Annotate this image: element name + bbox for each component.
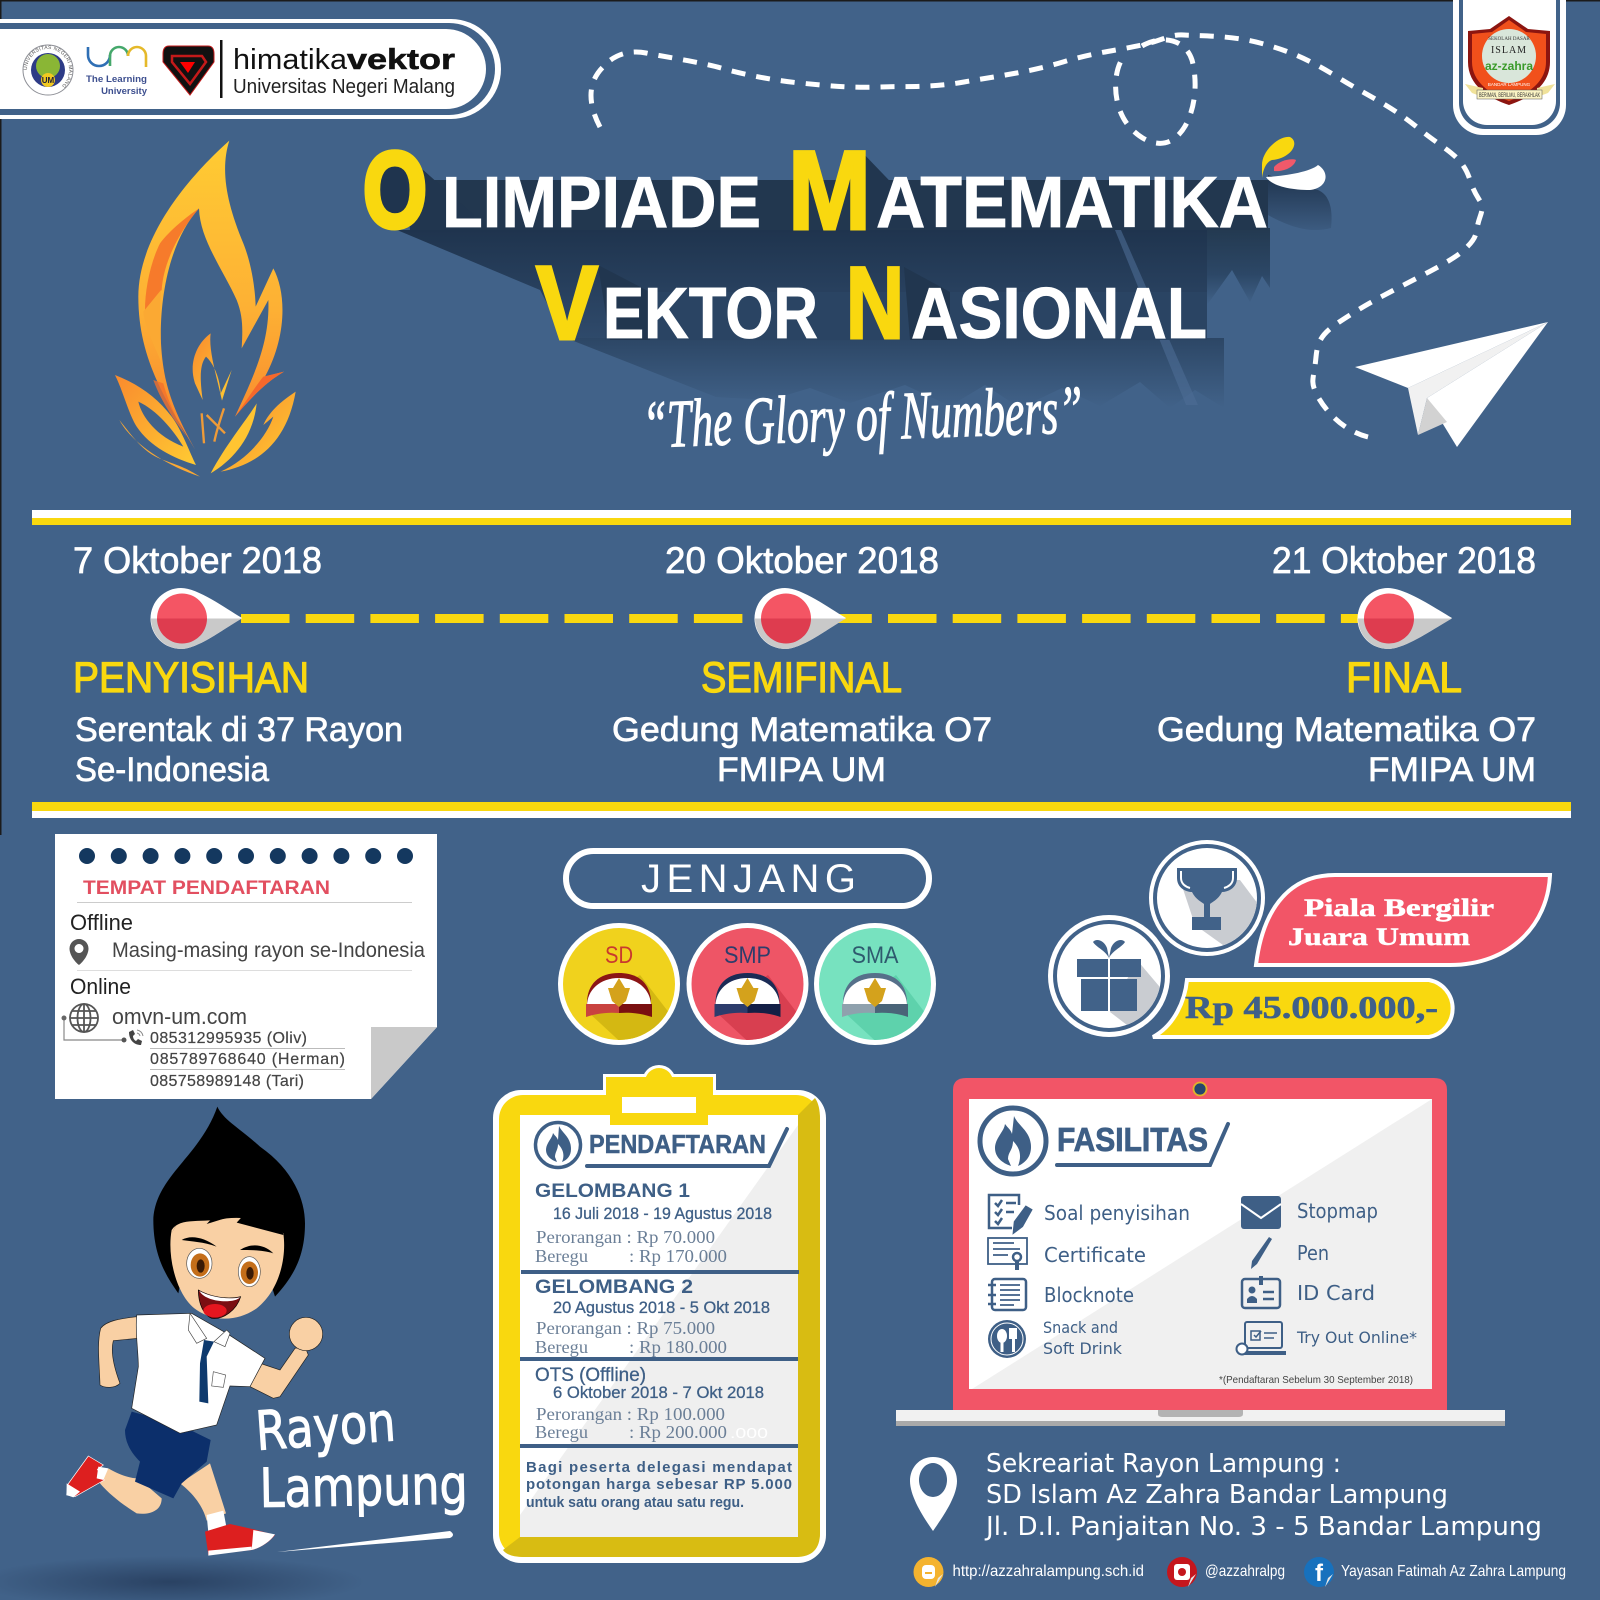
shorts [125,1412,211,1498]
logo: vektor shield [163,46,214,95]
icon: envelope [1241,1196,1281,1229]
icon: checklist [989,1195,1031,1232]
flame logo [115,141,296,477]
front shoe [205,1524,275,1555]
icon: location pin [910,1457,957,1531]
panel: pendaftaran clipboard: PENDAFTARAN [589,1129,766,1159]
icon: trophy badge [1149,840,1270,956]
title [363,128,1268,362]
logo: um the learning university [86,47,148,97]
school shield emblem: BERIMAN, BERILMU, BERAKHLAK [1479,93,1540,99]
ots: : Rp 200.000 [629,1422,727,1442]
discount note: potongan harga sebesar RP 5.000 [526,1476,792,1493]
milestone 2: Gedung Matematika O7 [612,711,992,749]
panel: pendaftaran clipboard [493,1065,826,1563]
icon: map pin [70,939,88,965]
logo: university seal: UM [42,76,55,85]
logo: university seal: UNIVERSITAS NEGERI MALANG [24,46,72,88]
gelombang 2: Perorangan : Rp 75.000 [536,1318,715,1338]
title: O [363,129,427,250]
facility items: Try Out Online* [1296,1328,1417,1347]
address block: Sekreariat Rayon Lampung : [986,1449,1341,1479]
jenjang SD badge: SD [605,942,633,969]
facility items: Certificate [1044,1243,1146,1267]
paper plane [1355,322,1548,447]
facility items: Snack and [1043,1318,1118,1337]
milestone 2: SEMIFINAL [701,654,902,702]
tie [199,1340,214,1403]
icon: facebook: f [1315,1560,1324,1587]
icon: globe [70,1004,98,1032]
timeline panel [32,510,1571,818]
collar [188,1313,230,1347]
milestone 2: FMIPA UM [717,751,886,789]
red banner: piala bergilir: Juara Umum [1288,924,1470,951]
jenjang SD badge [558,923,680,1045]
gelombang 1: GELOMBANG 1 [535,1181,690,1202]
title: ASIONAL [911,274,1207,354]
milestone 1: 7 Oktober 2018 [73,540,322,581]
fringe [172,1193,283,1235]
logo: himatika vektor wordmark: vektor [347,44,455,76]
ots: OTS (Offline) [535,1365,646,1386]
address block [910,1449,1542,1542]
panel: fasilitas laptop: FASILITAS [1057,1121,1208,1158]
milestone 3: FINAL [1346,654,1462,702]
milestone 2 [612,540,992,789]
icon: facebook [1304,1557,1334,1587]
school shield emblem: BANDAR LAMPUNG [1488,82,1531,87]
icon: plate and cutlery [988,1320,1026,1358]
rayon lampung lettering: Lampung [259,1453,468,1520]
milestone 3: FMIPA UM [1368,751,1536,789]
jenjang pill: JENJANG [641,857,856,901]
address block: Jl. D.I. Panjaitan No. 3 - 5 Bandar Lampung [984,1512,1542,1542]
webcam [1194,1082,1206,1096]
panel: tempat pendaftaran note: 085789768640 (Herman) [150,1051,345,1068]
milestone 1: Serentak di 37 Rayon [75,711,403,749]
milestone 3: Gedung Matematika O7 [1157,711,1536,749]
gelombang 2 [535,1277,770,1357]
right arm [250,1347,308,1398]
milestone 3: 21 Oktober 2018 [1272,540,1536,581]
facility items [1043,1199,1417,1358]
panel: tempat pendaftaran note [55,834,437,1099]
rayon lampung lettering: Rayon [254,1390,398,1463]
gelombang 1 [535,1181,772,1266]
facility items: Blocknote [1044,1283,1134,1307]
school shield emblem: ISLAM [1491,45,1527,56]
logo bar [0,19,501,119]
ots [535,1365,768,1442]
icon: online test laptop [1236,1322,1286,1354]
gelombang 1: Perorangan : Rp 70.000 [536,1227,715,1247]
hair back [153,1107,305,1297]
icon: id card [1242,1276,1280,1308]
title: N [846,246,904,360]
title: M [788,128,871,253]
icon: flame circle [980,1108,1046,1174]
back arm [99,1317,138,1387]
social links: @azzahralpg [1205,1563,1285,1580]
title: ATEMATIKA [876,163,1268,243]
jenjang SMP badge: SMP [724,942,771,969]
paper [520,1115,798,1537]
logo: himatika vektor wordmark: himatika [233,44,348,76]
jenjang pill [566,851,929,906]
panel: tempat pendaftaran note: omvn-um.com [112,1004,247,1029]
milestone 1: Se-Indonesia [75,751,269,789]
social links [914,1557,1566,1587]
face [170,1218,284,1319]
facility items: Soal penyisihan [1044,1201,1190,1225]
title: LIMPIADE [442,163,761,243]
panel: tempat pendaftaran note: 085758989148 (Tari) [150,1073,304,1090]
gelombang 2: GELOMBANG 2 [535,1277,693,1298]
title shadow [365,150,1332,408]
back leg [100,1468,162,1514]
gelombang 1: Beregu [535,1246,588,1266]
ots: .000 [730,1425,768,1442]
boy ground shadow [0,1556,365,1600]
butterfly ornament [1262,137,1326,190]
discount note: Bagi peserta delegasi mendapat [526,1459,792,1476]
discount note [526,1459,792,1511]
panel: tempat pendaftaran note: Masing-masing rayon se-Indonesia [112,939,425,962]
gelombang 1: 16 Juli 2018 - 19 Agustus 2018 [553,1204,772,1223]
ots: Beregu [535,1422,588,1442]
shirt [132,1313,265,1433]
jenjang SMA badge: SMA [852,942,898,969]
timeline dashed line [241,614,1370,623]
logo: um the learning university: The Learning [86,74,147,85]
icon: blogger [914,1557,944,1587]
milestone 2: 20 Oktober 2018 [665,540,939,581]
gelombang 2: : Rp 180.000 [629,1337,727,1357]
gelombang 2: Beregu [535,1337,588,1357]
ots: Perorangan : Rp 100.000 [536,1404,725,1424]
icon: notebook [988,1279,1026,1310]
yellow banner: prize amount [1153,980,1453,1037]
icon: certificate [988,1238,1027,1270]
panel: tempat pendaftaran note: 085312995935 (Oliv) [150,1030,307,1047]
gelombang 1: : Rp 170.000 [629,1246,727,1266]
tagline: “The Glory of Numbers” [641,371,1084,463]
jenjang SMA badge [814,923,936,1045]
connector and phone icon [62,1016,143,1045]
logo: himatika vektor wordmark [233,44,455,98]
red banner: piala bergilir [1256,875,1550,965]
rayon lampung lettering [254,1390,468,1552]
red banner: piala bergilir: Piala Bergilir [1304,895,1494,922]
facility items: ID Card [1297,1281,1375,1305]
discount note: untuk satu orang atau satu regu. [526,1494,744,1511]
panel: tempat pendaftaran note: TEMPAT PENDAFTARAN [83,877,330,899]
title: EKTOR [603,274,818,354]
school shield emblem [1465,16,1555,105]
icon: flame circle [536,1122,580,1168]
yellow banner: prize amount: Rp 45.000.000,- [1185,989,1438,1025]
mouth [198,1290,241,1319]
address block: SD Islam Az Zahra Bandar Lampung [986,1480,1448,1510]
footnote: *(Pendaftaran Sebelum 30 September 2018) [1219,1374,1413,1386]
panel: tempat pendaftaran note: Online [70,974,131,999]
school shield emblem: az-zahra [1485,59,1533,73]
milestone 3 [1157,540,1536,789]
facility items: Stopmap [1297,1199,1378,1223]
pocket [212,1372,226,1387]
social links: http://azzahralampung.sch.id [952,1563,1144,1580]
title: V [536,245,598,362]
school badge [1453,0,1566,135]
character: running boy [67,1107,323,1556]
back shoe [67,1456,104,1497]
facility items: Soft Drink [1043,1339,1123,1358]
icon: pen [1251,1237,1272,1269]
laptop base [896,1410,1505,1426]
social links: Yayasan Fatimah Az Zahra Lampung [1341,1563,1566,1580]
brows and eyes [182,1237,273,1287]
panel: fasilitas laptop [896,1078,1505,1426]
facility items: Pen [1297,1241,1329,1265]
panel: tempat pendaftaran note: Offline [70,910,133,935]
logo: himatika vektor wordmark: Universitas Negeri Malang [233,76,455,98]
clip [603,1065,716,1107]
gelombang 2: 20 Agustus 2018 - 5 Okt 2018 [553,1298,770,1317]
milestone 1 [73,540,403,789]
ots: 6 Oktober 2018 - 7 Okt 2018 [553,1383,764,1402]
dashed flight path [591,35,1482,437]
logo: um the learning university: University [101,86,148,97]
front leg [180,1463,226,1521]
icon: gift badge [1048,915,1175,1037]
milestone 1: PENYISIHAN [73,654,309,702]
jenjang SMP badge [686,923,808,1045]
icon: instagram [1167,1557,1197,1587]
school shield emblem: SEKOLAH DASAR [1488,37,1530,42]
